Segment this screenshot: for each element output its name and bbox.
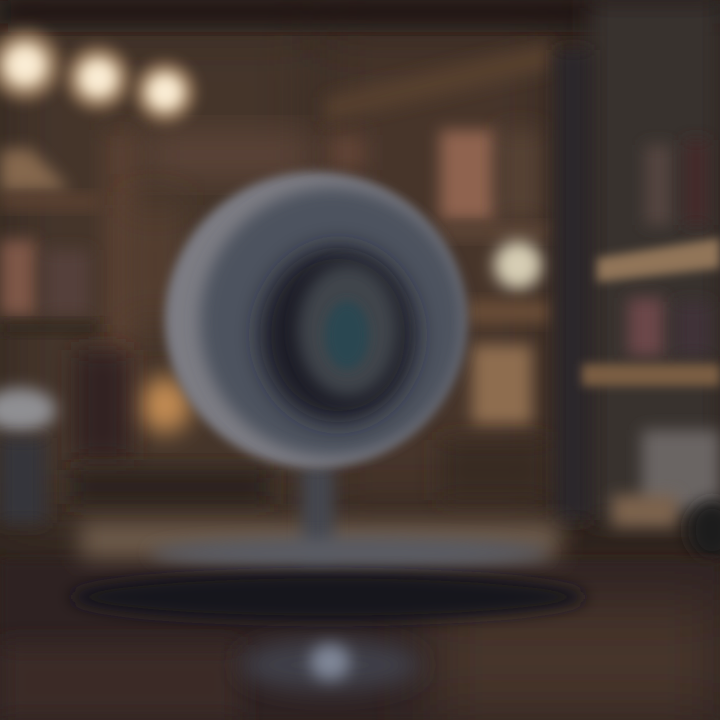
bookshelf: left wall (0, 130, 315, 504)
webcam: dark lens ring (260, 247, 416, 423)
webcam: round body with lens (165, 172, 465, 468)
bookshelf: right dark unit (556, 0, 720, 560)
bookshelf: centre back wall (325, 42, 550, 500)
webcam: inner ring (298, 264, 398, 396)
icon: three glowing ceiling lamps (0, 21, 203, 130)
webcam: stand and base (70, 465, 586, 621)
object: blurred grey item at left edge (0, 388, 56, 523)
floor: desk surface and reflections (0, 522, 720, 720)
webcam: glass lens (325, 301, 369, 369)
